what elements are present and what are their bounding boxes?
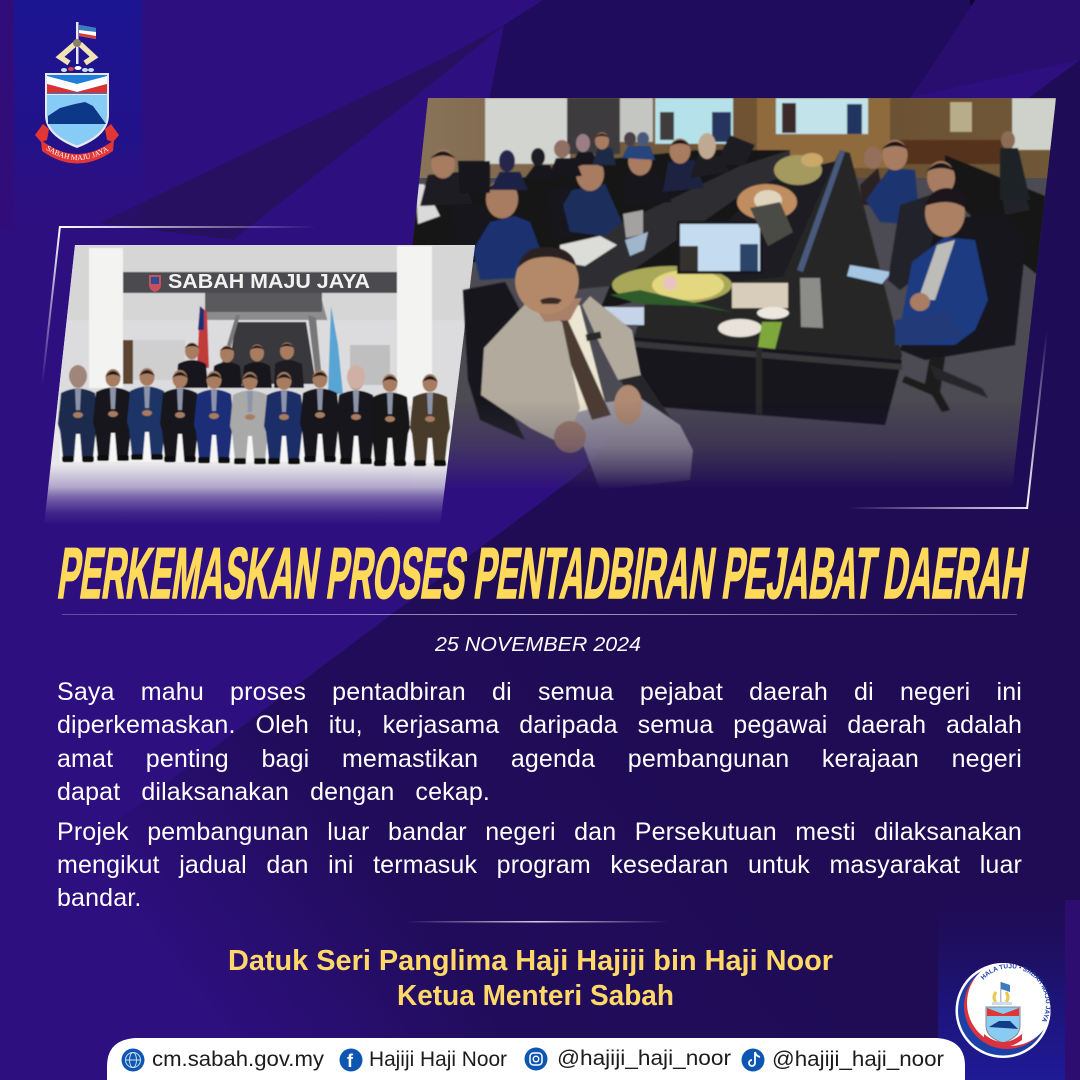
group photo stairs <box>205 293 322 384</box>
website: cm.sabah.gov.my <box>152 1048 325 1071</box>
group photo back row <box>176 342 304 388</box>
frame line top left <box>41 226 317 386</box>
group photo sign: SABAH MAJU JAYA <box>168 271 370 293</box>
group photo flags <box>197 306 343 394</box>
icon: Sabah coat of arms <box>35 22 119 164</box>
meeting room man in blue suit <box>895 188 1026 412</box>
badge: Hala Tuju logo: HALA TUJU • SABAH MAJU JAYA <box>980 964 1050 1022</box>
meeting room wall details <box>485 98 1056 168</box>
body text: first paragraph: amat penting bagi memastikan agenda pembangunan kerajaan negeri <box>57 745 1022 773</box>
icon: Sabah coat of arms: SABAH MAJU JAYA <box>46 146 109 160</box>
badge: Hala Tuju logo <box>956 963 1050 1058</box>
icon: instagram <box>524 1048 548 1070</box>
body text: first paragraph: dapat dilaksanakan dengan cekap. <box>57 778 490 806</box>
photo: group portrait <box>40 245 480 530</box>
group photo pillars <box>89 246 432 406</box>
date: 25 NOVEMBER 2024 <box>434 634 641 656</box>
body text: second paragraph: bandar. <box>57 884 141 912</box>
meeting room people right <box>860 131 1030 290</box>
icon: facebook <box>340 1048 362 1072</box>
meeting room flowers <box>610 153 823 312</box>
group photo front row <box>58 365 450 466</box>
body text: first paragraph: Saya mahu proses pentadbiran di semua pejabat daerah di negeri ini <box>57 678 1022 706</box>
meeting room name card and stand <box>415 184 892 349</box>
icon: website globe <box>122 1048 144 1072</box>
body text: second paragraph: mengikut jadual dan ini termasuk program kesedaran untuk masyarakat luar <box>57 851 1022 879</box>
icon: facebook: f <box>347 1051 354 1071</box>
body text: second paragraph <box>57 818 1022 912</box>
meeting room people left <box>420 132 755 280</box>
body text: first paragraph <box>57 678 1022 806</box>
meeting room tables <box>411 150 1050 425</box>
social bar <box>107 1038 965 1080</box>
body text: first paragraph: diperkemaskan. Oleh itu, kerjasama daripada semua pegawai daerah adalah <box>57 711 1022 739</box>
frame line bottom right <box>848 330 1048 509</box>
tiktok handle: @hajiji_haji_noor <box>772 1048 944 1071</box>
speaker role: Ketua Menteri Sabah <box>397 980 674 1012</box>
icon: tiktok <box>742 1048 764 1072</box>
instagram handle: @hajiji_haji_noor <box>557 1047 731 1070</box>
photo: seated man in grey suit <box>463 247 693 490</box>
facebook name: Hajiji Haji Noor <box>369 1048 507 1071</box>
group photo ceiling and walls <box>50 245 475 410</box>
name of speaker: Datuk Seri Panglima Haji Hajiji bin Haji Noor <box>228 945 833 977</box>
body text: second paragraph: Projek pembangunan luar bandar negeri dan Persekutuan mesti dilaksanakan <box>57 818 1022 846</box>
photo: meeting room <box>410 98 1060 518</box>
group photo seated chairs <box>60 424 448 463</box>
